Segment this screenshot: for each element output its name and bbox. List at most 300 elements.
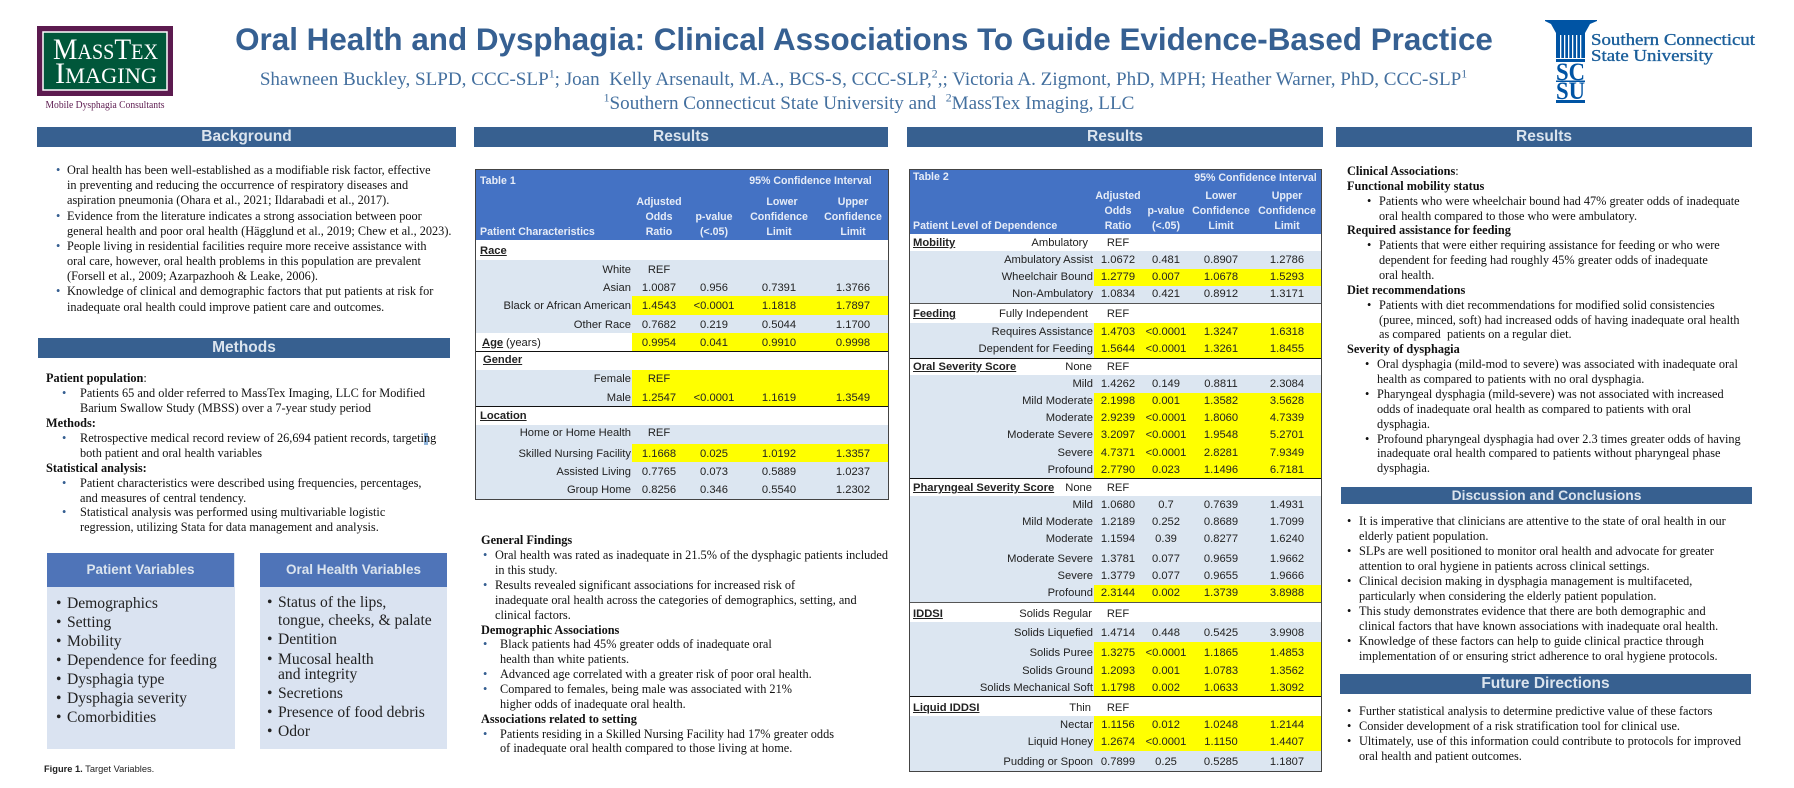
table 2: 95% Confidence Interval — [1194, 172, 1317, 184]
table 1: 95% Confidence Interval — [749, 175, 872, 187]
table 2: 1.2779 — [1101, 271, 1135, 283]
table 2: 1.2786 — [1270, 254, 1304, 266]
heading: Results column 2 — [474, 127, 888, 147]
table 2: 0.001 — [1152, 665, 1180, 677]
table 2: Odds — [1104, 205, 1132, 217]
table 2: 0.7639 — [1204, 499, 1238, 511]
text: future directions bullets: Further statistical analysis to determine predictive value of these factors — [1359, 704, 1712, 718]
table 2: Solids Puree — [1030, 647, 1093, 659]
text: methods: Patient population: — [46, 371, 147, 385]
text: general findings: Associations related to setting — [481, 712, 637, 726]
table 2: 0.8907 — [1204, 254, 1238, 266]
panel: patient variables: Dysphagia severity — [67, 690, 187, 707]
text: clinical associations: • — [1365, 387, 1369, 401]
table 2: 1.2093 — [1101, 665, 1135, 677]
text: clinical associations: (puree, minced, soft) had increased odds of having inadequate oral health — [1379, 313, 1740, 327]
table 2: Profound — [1048, 464, 1093, 476]
table 2: 4.7371 — [1101, 447, 1135, 459]
table 2: 0.448 — [1152, 627, 1180, 639]
text: methods: • — [62, 431, 66, 445]
text: discussion bullets: elderly patient population. — [1359, 529, 1488, 543]
table 2: 1.4853 — [1270, 647, 1304, 659]
table 2: 1.4931 — [1270, 499, 1304, 511]
table 1: Confidence — [824, 211, 882, 223]
table 2: Ambulatory Assist — [1004, 254, 1093, 266]
text: background bullets: Knowledge of clinical and demographic factors that put patients at risk for — [67, 284, 433, 298]
table 1: Black or African American — [504, 300, 631, 312]
text: clinical associations: Clinical Associations: — [1347, 164, 1459, 178]
table 2: 1.3562 — [1270, 665, 1304, 677]
text: methods: and measures of central tendency. — [80, 491, 246, 505]
table 1: 0.346 — [700, 484, 728, 496]
text: discussion bullets: Knowledge of these factors can help to guide clinical practice through — [1359, 634, 1704, 648]
text: future directions bullets: oral health and patient outcomes. — [1359, 749, 1522, 763]
table 2: Adjusted — [1095, 190, 1141, 202]
text: future directions bullets: • — [1347, 704, 1351, 718]
logo: Southern Connecticut State University: SC — [1556, 59, 1585, 86]
table 1: <0.0001 — [694, 392, 734, 404]
table 2: 0.8912 — [1204, 288, 1238, 300]
table 2: Requires Assistance — [992, 326, 1093, 338]
panel: oral health variables: • — [267, 685, 272, 702]
table 1 — [476, 170, 888, 499]
table 1: 1.1668 — [642, 448, 676, 460]
table 2: Feeding — [913, 308, 956, 320]
table 2: 4.7339 — [1270, 412, 1304, 424]
table 1: REF — [648, 264, 670, 276]
text: clinical associations: health as compared to patients with no oral dysphagia. — [1377, 372, 1644, 386]
table 2: 1.0783 — [1204, 665, 1238, 677]
table 1: 0.9910 — [762, 337, 796, 349]
table 1: Asian — [603, 282, 631, 294]
table 1: Limit — [840, 226, 866, 238]
text: general findings: in this study. — [495, 563, 557, 577]
table 1: Table 1 — [480, 175, 516, 187]
panel: oral health variables: and integrity — [278, 666, 357, 683]
table 2: None — [1065, 482, 1092, 494]
table 1: Age — [482, 337, 503, 349]
table 1: Home or Home Health — [520, 427, 631, 439]
table 2: 1.5293 — [1270, 271, 1304, 283]
text: background bullets: • — [56, 209, 60, 223]
table 2: Mild — [1072, 378, 1093, 390]
text: clinical associations: • — [1367, 238, 1371, 252]
table 2: 1.8060 — [1204, 412, 1238, 424]
table 2: 1.1496 — [1204, 464, 1238, 476]
table 2: 5.2701 — [1270, 429, 1304, 441]
table 2: 1.3092 — [1270, 682, 1304, 694]
logo: Southern Connecticut State University: Southern Connecticut — [1591, 30, 1755, 49]
heading: Methods: Methods — [212, 339, 276, 356]
panel: patient variables: Demographics — [67, 595, 158, 612]
text: discussion bullets: particularly when considering the elderly patient population. — [1359, 589, 1656, 603]
table 2: <0.0001 — [1146, 647, 1186, 659]
text: methods: both patient and oral health variables — [80, 446, 262, 460]
table 2 — [910, 170, 1321, 771]
table 2: 1.2189 — [1101, 516, 1135, 528]
table 2: <0.0001 — [1146, 412, 1186, 424]
text: discussion bullets: • — [1347, 634, 1351, 648]
table 1: 1.3549 — [836, 392, 870, 404]
text: background bullets: (Forsell et al., 2009; Azarpazhooh & Leake, 2006). — [67, 269, 318, 283]
heading: Results column 4 — [1336, 127, 1752, 147]
text: clinical associations: Pharyngeal dysphagia (mild-severe) was not associated with increased — [1377, 387, 1724, 401]
panel: patient variables: Mobility — [67, 633, 122, 650]
table 2: 1.4714 — [1101, 627, 1135, 639]
table 2: 3.9908 — [1270, 627, 1304, 639]
table 1: Patient Characteristics — [480, 226, 595, 238]
text: general findings: higher odds of inadequate oral health. — [500, 697, 686, 711]
text: future directions bullets — [1347, 704, 1741, 763]
table 2: 1.2144 — [1270, 719, 1304, 731]
table 2: 1.0678 — [1204, 271, 1238, 283]
table 2: 1.3582 — [1204, 395, 1238, 407]
table 2: 1.3781 — [1101, 553, 1135, 565]
table 2: 0.077 — [1152, 553, 1180, 565]
text: background bullets: in preventing and reducing the occurrence of respiratory diseases and — [67, 178, 408, 192]
table 1: 0.219 — [700, 319, 728, 331]
table 2: 0.252 — [1152, 516, 1180, 528]
table 2: 1.1798 — [1101, 682, 1135, 694]
table 1: Lower — [766, 196, 798, 208]
table 1: Assisted Living — [556, 466, 631, 478]
table 2: 1.6240 — [1270, 533, 1304, 545]
table 2: <0.0001 — [1146, 326, 1186, 338]
panel: patient variables: • — [56, 595, 61, 612]
table 2: 1.0672 — [1101, 254, 1135, 266]
table 1: 0.7765 — [642, 466, 676, 478]
title: Oral Health and Dysphagia: Clinical Associations To Guide Evidence-Based Practice — [235, 22, 1493, 57]
table 1: p-value — [695, 211, 733, 223]
text: methods: Statistical analysis: — [46, 461, 147, 475]
panel: oral health variables: • — [267, 723, 272, 740]
table 2: Pudding or Spoon — [1003, 756, 1093, 768]
table 1: 1.4543 — [642, 300, 676, 312]
panel: patient variables: Dysphagia type — [67, 671, 164, 688]
text: clinical associations: odds of inadequate oral health as compared to patients with oral — [1377, 402, 1691, 416]
table 1: Ratio — [646, 226, 672, 238]
text: discussion bullets — [1347, 514, 1726, 663]
table 1: Location — [480, 410, 527, 422]
table 1: <0.0001 — [694, 300, 734, 312]
table 2: 1.4703 — [1101, 326, 1135, 338]
table 2: Moderate — [1046, 412, 1093, 424]
table 1: REF — [648, 427, 670, 439]
text: discussion bullets: SLPs are well positioned to monitor oral health and advocate for greater — [1359, 544, 1714, 558]
text: general findings: • — [483, 548, 487, 562]
text: clinical associations: oral health compared to those who were ambulatory. — [1379, 209, 1637, 223]
table 1: Confidence — [750, 211, 808, 223]
table 2: 1.3247 — [1204, 326, 1238, 338]
text: general findings: Black patients had 45% greater odds of inadequate oral — [500, 637, 772, 651]
text: background bullets: general health and poor oral health (Hägglund et al., 2019; Chew et al., 2023). — [67, 224, 452, 238]
heading: Results column 4: Results — [1516, 128, 1572, 145]
table 2: 0.023 — [1152, 464, 1180, 476]
table 2: 0.001 — [1152, 395, 1180, 407]
text: general findings: General Findings — [481, 533, 572, 547]
text: background bullets: • — [56, 163, 60, 177]
table 2: 1.0248 — [1204, 719, 1238, 731]
text: future directions bullets: • — [1347, 719, 1351, 733]
table 1: Group Home — [567, 484, 631, 496]
table 2: 0.8811 — [1204, 378, 1238, 390]
table 2: 0.5425 — [1204, 627, 1238, 639]
table 1: Adjusted — [636, 196, 682, 208]
text: clinical associations: • — [1367, 298, 1371, 312]
table 1: 0.041 — [700, 337, 728, 349]
table 1: Odds — [645, 211, 673, 223]
table 2: 6.7181 — [1270, 464, 1304, 476]
panel: oral health variables: Oral Health Variables — [286, 562, 421, 577]
table 1: Male — [607, 392, 631, 404]
heading: Background — [37, 127, 456, 147]
table 1: 1.2547 — [642, 392, 676, 404]
table 1: 0.7682 — [642, 319, 676, 331]
table 2: 0.012 — [1152, 719, 1180, 731]
table 2: IDDSI — [913, 608, 943, 620]
table 2: 3.2097 — [1101, 429, 1135, 441]
text: background bullets: People living in residential facilities require more receive assistance with — [67, 239, 427, 253]
table 2: REF — [1107, 702, 1129, 714]
panel: oral health variables: • — [267, 651, 272, 668]
panel: patient variables: • — [56, 690, 61, 707]
authors: Shawneen Buckley, SLPD, CCC-SLP1; Joan Kelly Arsenault, M.A., BCS-S, CCC-SLP,2,; Victoria A. Zigmont, PhD, MPH; Heather Warner, PhD, CCC-SLP1 — [260, 67, 1467, 90]
table 2: REF — [1107, 308, 1129, 320]
logo: MassTex Imaging: IMAGING — [55, 57, 157, 90]
logo: MassTex Imaging: Mobile Dysphagia Consultants — [46, 100, 165, 111]
table 2: Limit — [1274, 220, 1300, 232]
heading: Future Directions: Future Directions — [1481, 675, 1610, 692]
table 2: 2.7790 — [1101, 464, 1135, 476]
table 2: <0.0001 — [1146, 447, 1186, 459]
table 1: 0.9954 — [642, 337, 676, 349]
text: clinical associations: Diet recommendations — [1347, 283, 1465, 297]
table 2: 1.3739 — [1204, 587, 1238, 599]
panel: oral health variables: • — [267, 631, 272, 648]
text: general findings: Compared to females, being male was associated with 21% — [500, 682, 792, 696]
table 2: 0.002 — [1152, 682, 1180, 694]
panel: patient variables: • — [56, 671, 61, 688]
table 2: 0.7899 — [1101, 756, 1135, 768]
table 2: Mild — [1072, 499, 1093, 511]
panel: oral health variables: Odor — [278, 723, 310, 740]
text: methods — [46, 371, 436, 534]
text: general findings: Oral health was rated as inadequate in 21.5% of the dysphagic patients included — [495, 548, 888, 562]
text: clinical associations: dysphagia. — [1377, 461, 1430, 475]
text: clinical associations: Required assistance for feeding — [1347, 223, 1511, 237]
panel: patient variables — [47, 553, 235, 749]
table 1: 1.1700 — [836, 319, 870, 331]
text: clinical associations: • — [1365, 357, 1369, 371]
text: general findings — [481, 533, 888, 755]
text: general findings: • — [483, 682, 487, 696]
panel: patient variables: • — [56, 633, 61, 650]
table 2: None — [1065, 361, 1092, 373]
table 1: Race — [480, 245, 507, 257]
table 2: 1.1156 — [1101, 719, 1135, 731]
panel: patient variables: Dependence for feeding — [67, 652, 217, 669]
table 2: Confidence — [1192, 205, 1250, 217]
table 2: 0.8689 — [1204, 516, 1238, 528]
table 2: Patient Level of Dependence — [913, 220, 1057, 232]
panel: oral health variables: Status of the lips, — [278, 594, 386, 611]
text: discussion bullets: clinical factors that have known associations with inadequate oral health. — [1359, 619, 1718, 633]
table 1: 1.0237 — [836, 466, 870, 478]
table 2: Pharyngeal Severity Score — [913, 482, 1054, 494]
table 2: 1.8455 — [1270, 343, 1304, 355]
table 1: Limit — [766, 226, 792, 238]
table 2: <0.0001 — [1146, 343, 1186, 355]
text: discussion bullets: implementation of or ensuring strict adherence to oral hygiene protocols. — [1359, 649, 1718, 663]
table 1: 1.3766 — [836, 282, 870, 294]
table 2: REF — [1107, 237, 1129, 249]
text: methods: Patient characteristics were described using frequencies, percentages, — [80, 476, 421, 490]
table 2: Severe — [1058, 570, 1093, 582]
table 2: <0.0001 — [1146, 429, 1186, 441]
panel: oral health variables: Presence of food debris — [278, 704, 425, 721]
table 1: 1.1619 — [762, 392, 796, 404]
table 1: 0.956 — [700, 282, 728, 294]
text: general findings: Advanced age correlated with a greater risk of poor oral health. — [500, 667, 812, 681]
table 2: 1.9548 — [1204, 429, 1238, 441]
text: general findings: of inadequate oral health compared to those living at home. — [500, 741, 792, 755]
table 2: 1.9666 — [1270, 570, 1304, 582]
table 2: 1.7099 — [1270, 516, 1304, 528]
text: clinical associations: Functional mobility status — [1347, 179, 1484, 193]
text: clinical associations: • — [1365, 432, 1369, 446]
text: general findings: Demographic Associations — [481, 623, 619, 637]
table 1: 0.5540 — [762, 484, 796, 496]
table 2: 0.7 — [1158, 499, 1174, 511]
table 2: 0.077 — [1152, 570, 1180, 582]
table 2: 1.3779 — [1101, 570, 1135, 582]
logo: MassTex Imaging — [37, 26, 173, 111]
panel: oral health variables: • — [267, 594, 272, 611]
text: future directions bullets: • — [1347, 734, 1351, 748]
table 1: 0.5889 — [762, 466, 796, 478]
heading: Results column 3 — [907, 127, 1323, 147]
table 1: 1.2302 — [836, 484, 870, 496]
text: background bullets: aspiration pneumonia (Ohara et al., 2021; Ildarabadi et al., 2017). — [67, 193, 389, 207]
text: general findings: • — [483, 667, 487, 681]
table 2: 7.9349 — [1270, 447, 1304, 459]
table 2: Liquid Honey — [1028, 736, 1093, 748]
table 2: 3.5628 — [1270, 395, 1304, 407]
text: methods: • — [62, 505, 66, 519]
text: clinical associations: oral health. — [1379, 268, 1434, 282]
text: background bullets — [56, 163, 452, 314]
table 1: (<.05) — [700, 226, 728, 238]
table 2: 1.0834 — [1101, 288, 1135, 300]
logo: MassTex Imaging: MASSTEX — [53, 33, 158, 66]
text: clinical associations: Patients who were wheelchair bound had 47% greater odds of inadequate — [1379, 194, 1740, 208]
text: general findings: inadequate oral health across the categories of demographics, setting, and — [495, 593, 857, 607]
table 2: Solids Mechanical Soft — [980, 682, 1093, 694]
table 2: 1.3171 — [1270, 288, 1304, 300]
text: general findings: • — [483, 727, 487, 741]
table 2: 0.8277 — [1204, 533, 1238, 545]
table 2: Mild Moderate — [1022, 395, 1093, 407]
table 2: 1.1807 — [1270, 756, 1304, 768]
table 2: 1.0680 — [1101, 499, 1135, 511]
table 2: Severe — [1058, 447, 1093, 459]
table 1: Gender — [483, 354, 522, 366]
panel: oral health variables: Secretions — [278, 685, 343, 702]
table 2: Liquid IDDSI — [913, 702, 980, 714]
table 2: 1.9662 — [1270, 553, 1304, 565]
text: clinical associations: Profound pharyngeal dysphagia had over 2.3 times greater odds of having — [1377, 432, 1741, 446]
table 2: Non-Ambulatory — [1012, 288, 1093, 300]
affiliations: 1Southern Connecticut State University and 2MassTex Imaging, LLC — [604, 91, 1134, 114]
text: methods: Patients 65 and older referred to MassTex Imaging, LLC for Modified — [80, 386, 425, 400]
table 2: 1.3261 — [1204, 343, 1238, 355]
logo: Southern Connecticut State University: State University — [1591, 46, 1714, 65]
text: discussion bullets: • — [1347, 574, 1351, 588]
table 2: 0.39 — [1155, 533, 1177, 545]
table 2: Solids Liquefied — [1014, 627, 1093, 639]
text: methods: Barium Swallow Study (MBSS) over a 7-year study period — [80, 401, 371, 415]
table 2: Nectar — [1060, 719, 1093, 731]
table 2: Profound — [1048, 587, 1093, 599]
panel: patient variables: Patient Variables — [86, 562, 195, 577]
table 2: Lower — [1205, 190, 1237, 202]
text: methods: Statistical analysis was performed using multivariable logistic — [80, 505, 385, 519]
table 2: 0.5285 — [1204, 756, 1238, 768]
table 2: 3.8988 — [1270, 587, 1304, 599]
text: clinical associations: • — [1367, 194, 1371, 208]
heading: Background: Background — [201, 128, 292, 145]
table 1: 1.0192 — [762, 448, 796, 460]
text: general findings: Patients residing in a Skilled Nursing Facility had 17% greater odds — [500, 727, 834, 741]
table 2: 0.9659 — [1204, 553, 1238, 565]
table 2: 0.149 — [1152, 378, 1180, 390]
text: methods: Methods: — [46, 416, 96, 430]
panel: oral health variables: • — [267, 704, 272, 721]
table 1: 0.5044 — [762, 319, 796, 331]
table 1: (years) — [506, 337, 541, 349]
panel: patient variables: Setting — [67, 614, 111, 631]
text: methods: • — [62, 386, 66, 400]
text: general findings: • — [483, 578, 487, 592]
table 1: White — [602, 264, 631, 276]
table 2: REF — [1107, 361, 1129, 373]
table 2: Ratio — [1105, 220, 1131, 232]
table 2: 0.421 — [1152, 288, 1180, 300]
table 2: Limit — [1208, 220, 1234, 232]
panel: oral health variables — [260, 553, 447, 749]
table 1: REF — [648, 373, 670, 385]
table 2: 1.1594 — [1101, 533, 1135, 545]
logo: Southern Connecticut State University — [1545, 20, 1756, 104]
table 2: Wheelchair Bound — [1002, 271, 1093, 283]
table 1: 1.0087 — [642, 282, 676, 294]
table 2: 1.4407 — [1270, 736, 1304, 748]
text: discussion bullets: This study demonstrates evidence that there are both demographic and — [1359, 604, 1706, 618]
text: clinical associations: dysphagia. — [1377, 417, 1430, 431]
heading: Discussion and Conclusions: Discussion and Conclusions — [1452, 487, 1641, 503]
table 2: 0.25 — [1155, 756, 1177, 768]
table 2: Mobility — [913, 237, 955, 249]
table 2: Thin — [1069, 702, 1091, 714]
table 1: 0.073 — [700, 466, 728, 478]
text: discussion bullets: It is imperative that clinicians are attentive to the state of oral health in our — [1359, 514, 1726, 528]
table 1: 1.3357 — [836, 448, 870, 460]
table 2: Moderate Severe — [1007, 429, 1093, 441]
table 2: Confidence — [1258, 205, 1316, 217]
table 1: 0.7391 — [762, 282, 796, 294]
table 2: Ambulatory — [1031, 237, 1088, 249]
panel: oral health variables: Mucosal health — [278, 651, 374, 668]
